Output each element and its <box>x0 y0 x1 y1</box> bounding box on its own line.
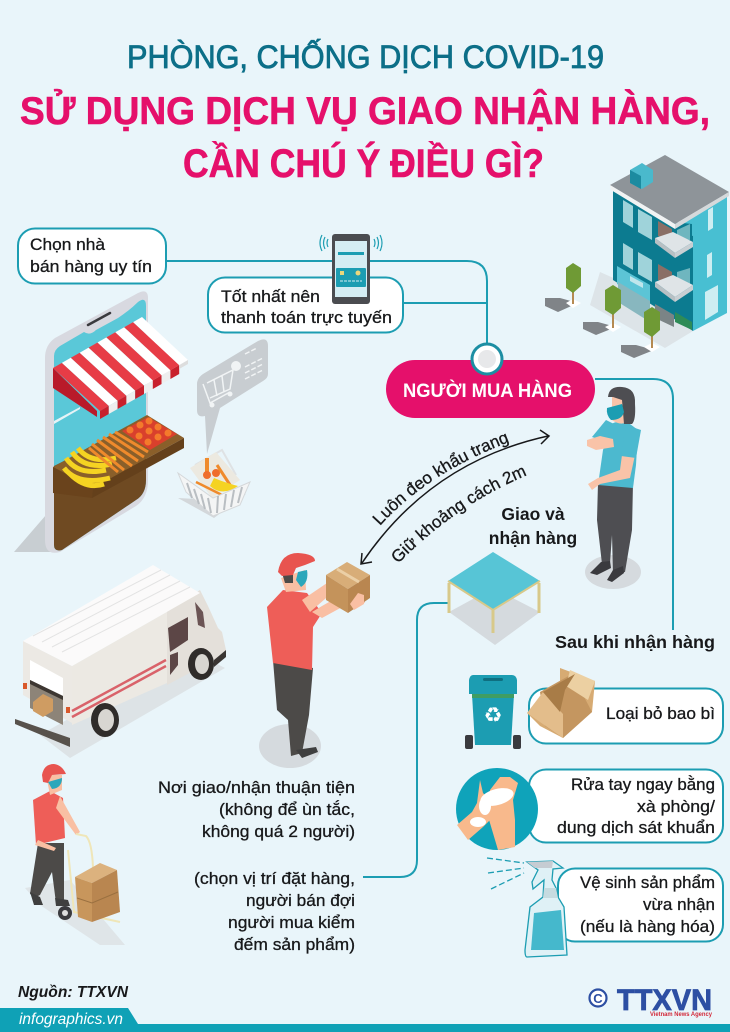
text: convenient delivery location <box>158 778 355 841</box>
illustration: buyer woman with mask <box>585 387 641 589</box>
parcels <box>75 863 120 922</box>
text: choose a pickup spot: người bán đợi <box>246 891 355 910</box>
panel: wash hands <box>529 770 723 842</box>
text: choose a pickup spot: người mua kiểm <box>228 913 355 932</box>
panel: wash hands: dung dịch sát khuẩn <box>557 818 715 837</box>
title <box>20 39 710 186</box>
icon: shopping cart speech bubble <box>197 339 268 454</box>
callout: choose seller: Chọn nhà <box>30 235 106 254</box>
text: always wear a mask and keep 2m on a curved double arrow: Luôn đeo khẩu trang <box>372 434 509 526</box>
logo: TTXVN: Vietnam News Agency <box>650 1012 713 1018</box>
title: CẦN CHÚ Ý ĐIỀU GÌ? <box>183 140 544 186</box>
footer band: infographics.vn <box>19 1011 123 1028</box>
button: buyer <box>386 344 673 630</box>
panel: sanitize products: (nếu là hàng hóa) <box>580 917 715 936</box>
icon: spray bottle <box>487 858 567 957</box>
heading: after receiving: Sau khi nhận hàng <box>555 632 715 652</box>
heading: delivery and receipt <box>489 504 577 548</box>
panel: sanitize products: vừa nhận <box>643 895 715 914</box>
source: Nguồn: TTXVN <box>18 984 128 1001</box>
footer band <box>0 1008 730 1032</box>
left face windows <box>623 200 652 282</box>
awning <box>53 317 188 419</box>
illustration: delivery van <box>15 565 226 758</box>
callout: choose seller: bán hàng uy tín <box>30 257 152 276</box>
icon: smartphone payment <box>320 234 382 304</box>
icon: grocery basket <box>178 450 250 518</box>
logo: TTXVN: TTXVN <box>617 984 712 1017</box>
callout: choose seller <box>18 228 166 284</box>
heading: delivery and receipt: Giao và <box>501 504 565 524</box>
connector lines: buyer to seller and payment <box>166 261 487 345</box>
title: SỬ DỤNG DỊCH VỤ GIAO NHẬN HÀNG, <box>20 89 710 133</box>
line: table to delivery notes <box>363 603 449 877</box>
parcel <box>326 562 370 613</box>
callout: pay online <box>208 278 403 332</box>
text: always wear a mask and keep 2m on a curved double arrow <box>360 429 550 565</box>
logo: TTXVN: C <box>593 991 603 1006</box>
panel: sanitize products <box>558 868 723 942</box>
fruit shelf <box>53 415 184 498</box>
panel: discard packaging <box>529 688 723 744</box>
illustration: man with hand truck <box>25 764 125 945</box>
text: choose a pickup spot <box>194 869 355 954</box>
callout: pay online: thanh toán trực tuyến <box>221 308 392 327</box>
icon: recycling bin: ♻ <box>484 704 502 727</box>
callout: pay online: Tốt nhất nên <box>221 287 320 306</box>
panel: wash hands: Rửa tay ngay bằng <box>571 775 715 794</box>
icon: open cardboard box <box>527 668 595 738</box>
panel: discard packaging: Loại bỏ bao bì <box>606 704 715 723</box>
title: PHÒNG, CHỐNG DỊCH COVID-19 <box>127 39 604 75</box>
illustration: shopping app phone with market stall <box>14 291 188 553</box>
text: convenient delivery location: không quá 2 người) <box>202 822 355 841</box>
button: buyer: NGƯỜI MUA HÀNG <box>403 380 572 402</box>
illustration: building <box>545 155 729 358</box>
panel: sanitize products: Vệ sinh sản phẩm <box>580 873 715 892</box>
icon: drop-off table <box>448 552 540 645</box>
balconies <box>655 220 693 302</box>
text: convenient delivery location: Nơi giao/nhận thuận tiện <box>158 778 355 797</box>
panel: wash hands: xà phòng/ <box>637 797 715 816</box>
text: always wear a mask and keep 2m on a curved double arrow: Giữ khoảng cách 2m <box>392 468 526 562</box>
illustration: delivery man with parcel <box>259 553 370 768</box>
text: convenient delivery location: (không để ùn tắc, <box>219 800 355 819</box>
heading: delivery and receipt: nhận hàng <box>489 528 577 548</box>
shop front <box>617 266 692 330</box>
text: choose a pickup spot: đếm sản phẩm) <box>234 935 355 954</box>
icon: recycling bin <box>465 675 521 749</box>
icon: hand washing <box>456 768 538 850</box>
text: choose a pickup spot: (chọn vị trí đặt hàng, <box>194 869 355 888</box>
trees <box>545 263 660 358</box>
